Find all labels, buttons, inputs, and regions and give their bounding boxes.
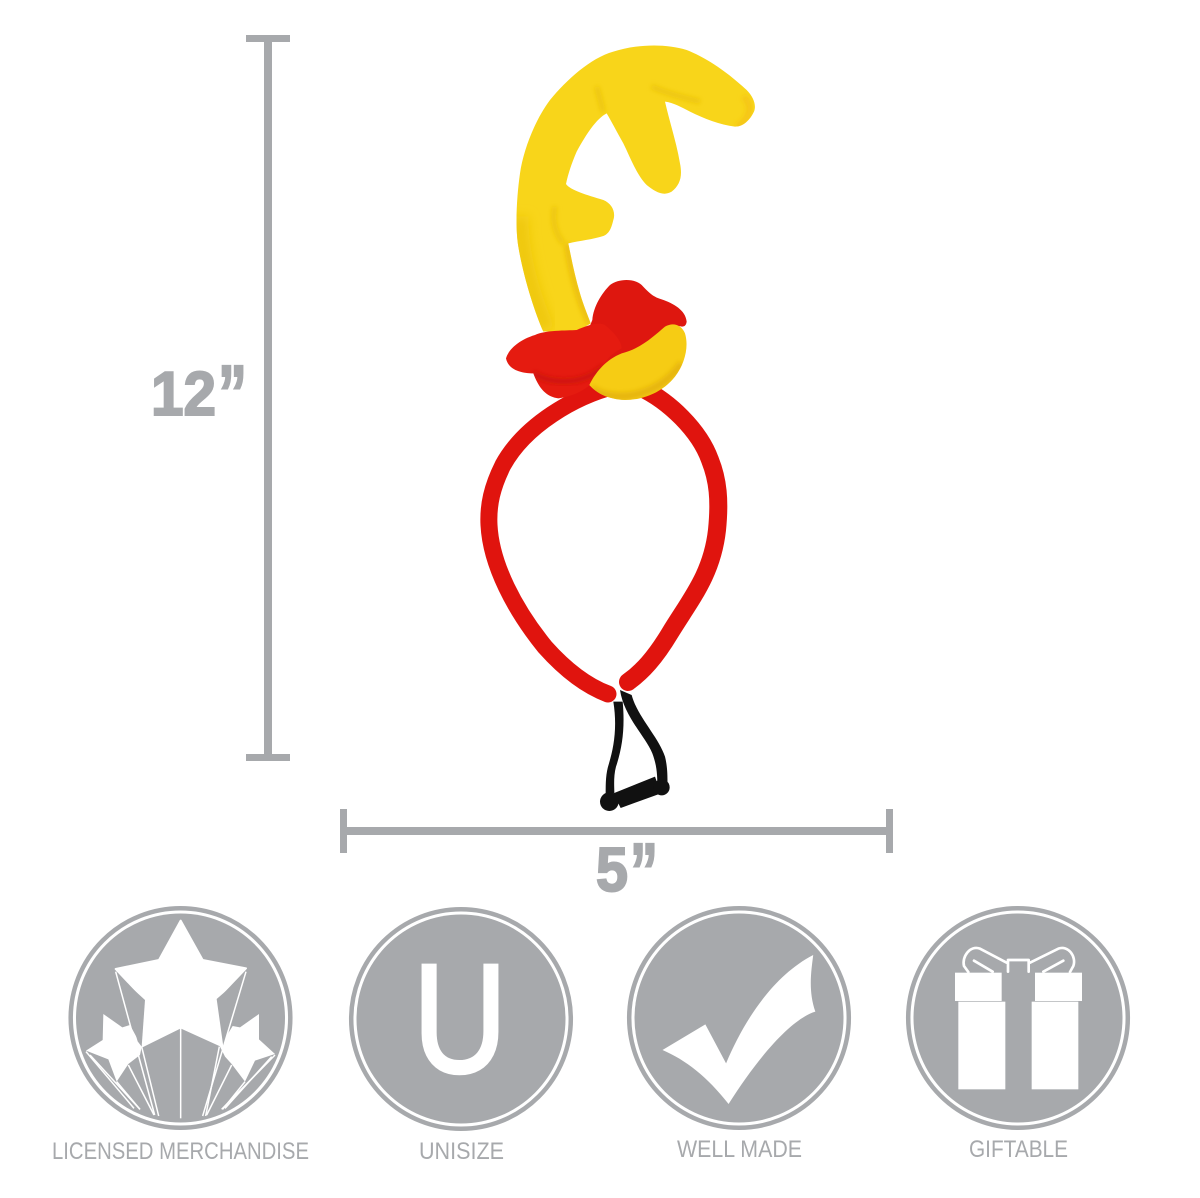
label: unisize: UNISIZE (419, 1138, 504, 1165)
height label (151, 349, 247, 438)
icon: giftable present (908, 908, 1128, 1128)
height label: 12 (151, 360, 216, 429)
large star (116, 921, 246, 1047)
width label: 5 (596, 836, 628, 905)
star trails (86, 972, 275, 1118)
icon: unisize U (351, 909, 571, 1129)
label: giftable: GIFTABLE (969, 1136, 1068, 1163)
width dimension bar (340, 809, 893, 853)
icon: licensed merchandise stars (71, 908, 290, 1128)
width label (596, 827, 658, 916)
red headband loop (489, 385, 718, 694)
width label: ” (630, 827, 658, 916)
label: licensed merchandise: LICENSED MERCHANDISE (52, 1138, 309, 1165)
height label: ” (218, 349, 247, 438)
red bow (506, 280, 687, 400)
icon: unisize U: U (413, 932, 507, 1106)
icon: well made check mark (629, 908, 849, 1128)
yellow antler base (589, 324, 687, 400)
height dimension bar (246, 35, 290, 761)
label: well made: WELL MADE (677, 1136, 802, 1163)
small stars (86, 1014, 142, 1082)
yellow antler (516, 46, 755, 332)
gray wedges (118, 975, 145, 1047)
product: antler headband (489, 30, 777, 811)
black strap and clip (600, 690, 670, 811)
